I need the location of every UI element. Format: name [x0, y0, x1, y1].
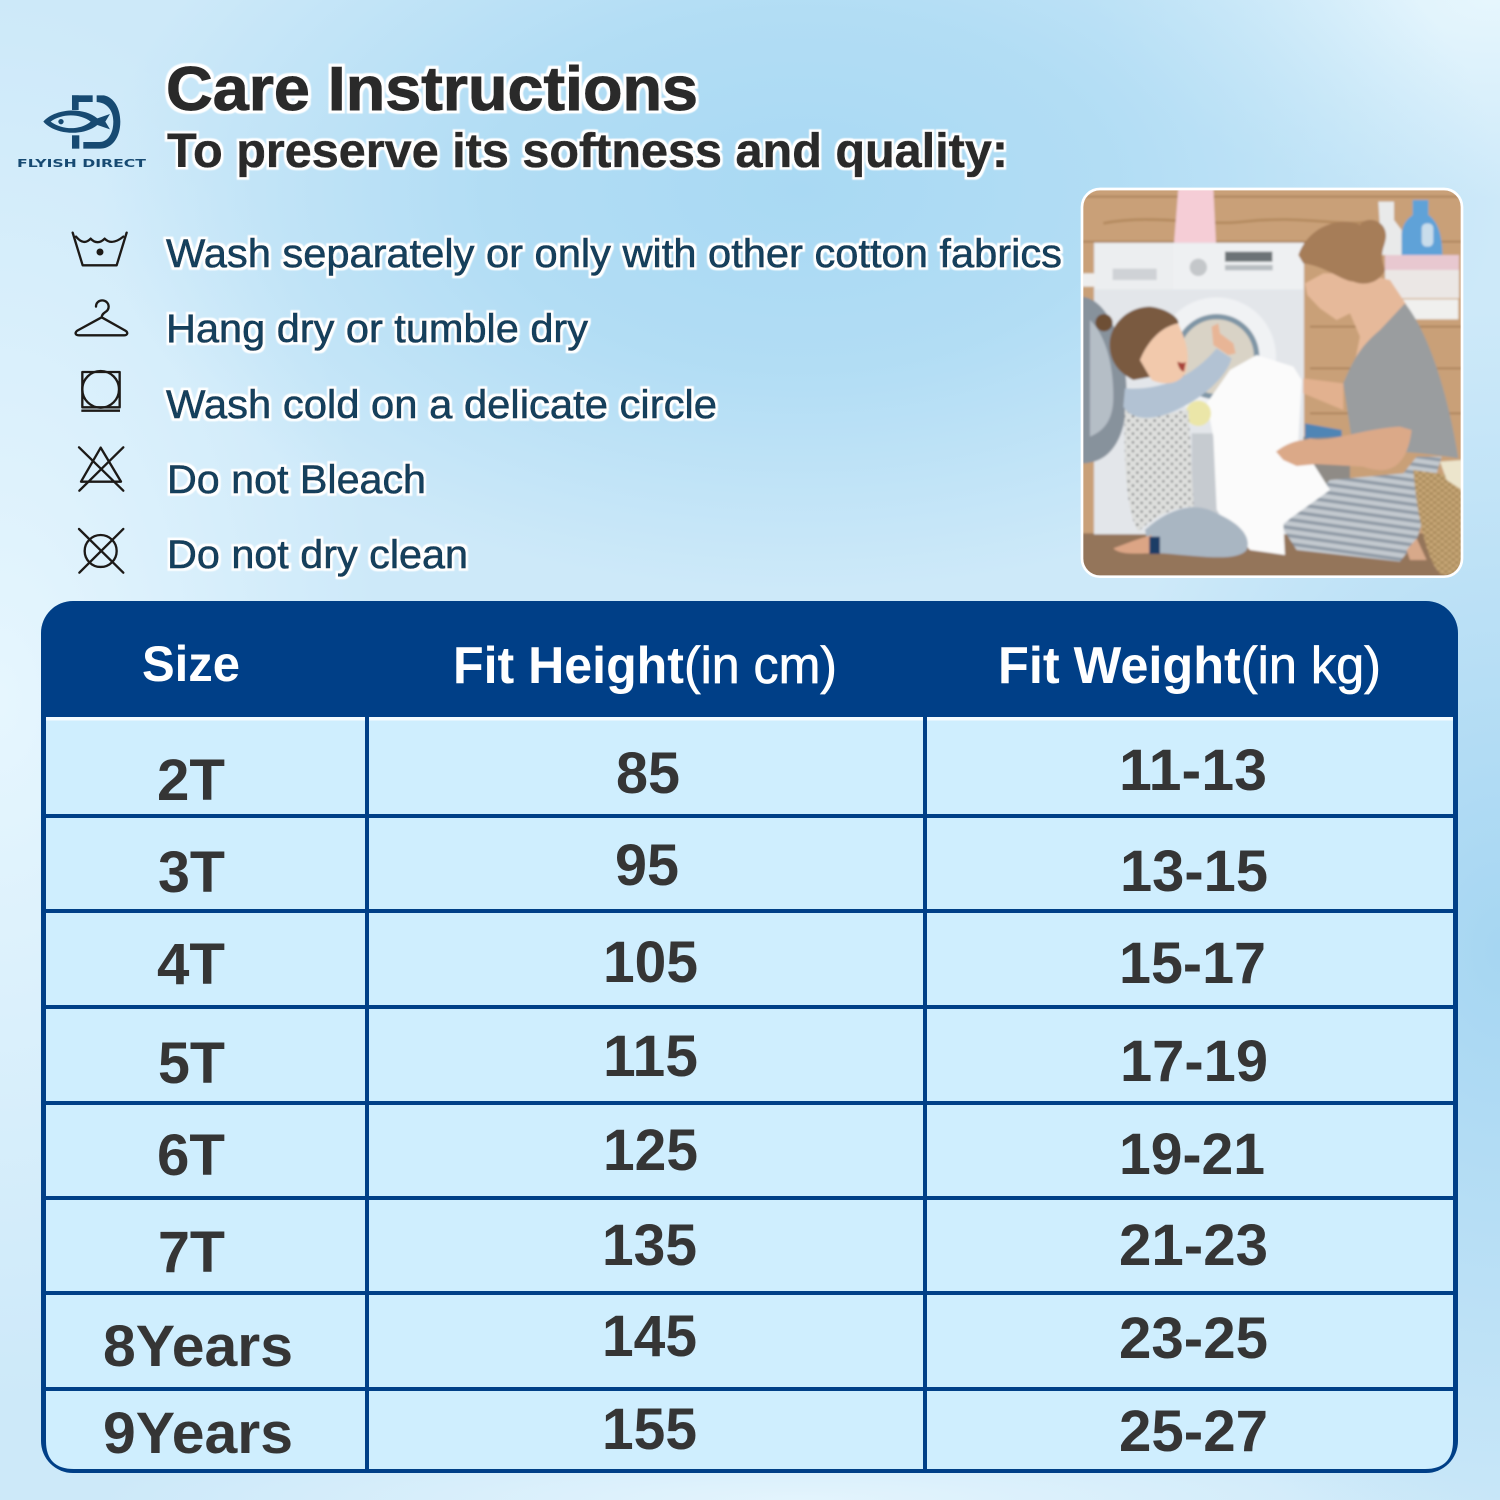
row 6T: 6T [157, 1123, 225, 1188]
care text: wash separately: Wash separately or only with other cotton fabrics [166, 232, 1062, 276]
row 6T [157, 1118, 1265, 1188]
icon: hanger [76, 300, 127, 335]
row 4T [157, 930, 1266, 997]
row 2T: 2T [157, 748, 225, 813]
row 7T: 21-23 [1119, 1213, 1268, 1278]
row 4T: 4T [157, 932, 225, 997]
table cell area [46, 720, 1453, 1469]
straw basket [1413, 470, 1462, 575]
row 9 years: 155 [602, 1397, 697, 1462]
child hair [1110, 307, 1178, 380]
row 6T: 125 [603, 1118, 698, 1183]
logo mark: fish and D [43, 95, 120, 149]
woman body [1343, 303, 1458, 458]
shadow under arm [1303, 437, 1350, 483]
white basket [1383, 268, 1460, 300]
washing machine [1094, 243, 1304, 534]
child torso [1125, 407, 1193, 532]
floor [1080, 533, 1463, 578]
row 8 years [103, 1304, 1268, 1379]
row 3T [158, 833, 1268, 905]
child foot [1113, 535, 1152, 554]
row 2T: 85 [616, 741, 680, 806]
care text: wash cold: Wash cold on a delicate circle [166, 383, 717, 427]
row 7T: 7T [158, 1220, 225, 1285]
detergent bottles [1378, 202, 1402, 255]
care text: do not bleach: Do not Bleach [167, 458, 426, 502]
row 4T: 15-17 [1119, 931, 1266, 996]
woman foot [1407, 538, 1427, 560]
row 8 years: 145 [602, 1304, 697, 1369]
row 9 years: 25-27 [1119, 1399, 1268, 1464]
table frame and header [41, 601, 1458, 1473]
row 8 years: 23-25 [1119, 1306, 1268, 1371]
header: fit height: Fit Height(in cm) [453, 637, 837, 695]
woman hair [1298, 220, 1386, 284]
row 9 years [103, 1397, 1268, 1466]
icon: square with circle [81, 371, 120, 411]
machine door opening [1175, 298, 1276, 406]
row 5T: 115 [603, 1024, 698, 1089]
icon: wash tub [73, 233, 127, 265]
icon: do not dry clean [79, 529, 123, 573]
row 6T: 19-21 [1119, 1122, 1265, 1187]
header: fit weight: Fit Weight(in kg) [998, 637, 1381, 695]
towel [1207, 355, 1330, 555]
woman face and chest [1304, 272, 1406, 356]
child arm [1123, 348, 1232, 418]
child hand [1212, 323, 1236, 355]
woman arm lower [1307, 426, 1412, 470]
row 3T: 3T [158, 840, 225, 905]
folded cloth in machine [1305, 423, 1342, 438]
logo wordmark: FLYISH DIRECT [17, 157, 147, 170]
header: size: Size [142, 636, 240, 692]
size table [41, 601, 1458, 1473]
row 5T: 5T [158, 1031, 225, 1096]
woman arm upper [1303, 378, 1343, 410]
child face [1140, 323, 1188, 383]
pink bottle [1174, 189, 1216, 243]
title: Care Instructions [166, 55, 698, 124]
icon: do not bleach [79, 447, 123, 491]
photo: mother and child at washing machine [1080, 187, 1463, 578]
woman trousers [1282, 457, 1442, 562]
row 4T: 105 [603, 930, 698, 995]
hand on towel [1276, 439, 1314, 468]
row 2T [157, 738, 1267, 813]
row 7T: 135 [602, 1213, 697, 1278]
row 9 years: 9Years [103, 1401, 293, 1466]
yellow cloth [1186, 401, 1211, 426]
row 3T: 95 [615, 833, 679, 898]
child trousers [1145, 507, 1248, 557]
open door [1082, 297, 1127, 463]
row 8 years: 8Years [103, 1314, 293, 1379]
wood wall [1080, 187, 1463, 553]
row 3T: 13-15 [1120, 839, 1268, 904]
care instruction list [73, 232, 1062, 577]
logo: Flyish Direct [17, 95, 147, 170]
row 7T [158, 1213, 1268, 1285]
row 5T: 17-19 [1120, 1029, 1268, 1094]
row 2T: 11-13 [1119, 738, 1267, 803]
care text: hang dry: Hang dry or tumble dry [166, 307, 588, 351]
subtitle: To preserve its softness and quality: [167, 125, 1008, 178]
care text: do not dry clean: Do not dry clean [167, 533, 468, 577]
shelf [1398, 299, 1458, 319]
row 5T [158, 1024, 1268, 1096]
